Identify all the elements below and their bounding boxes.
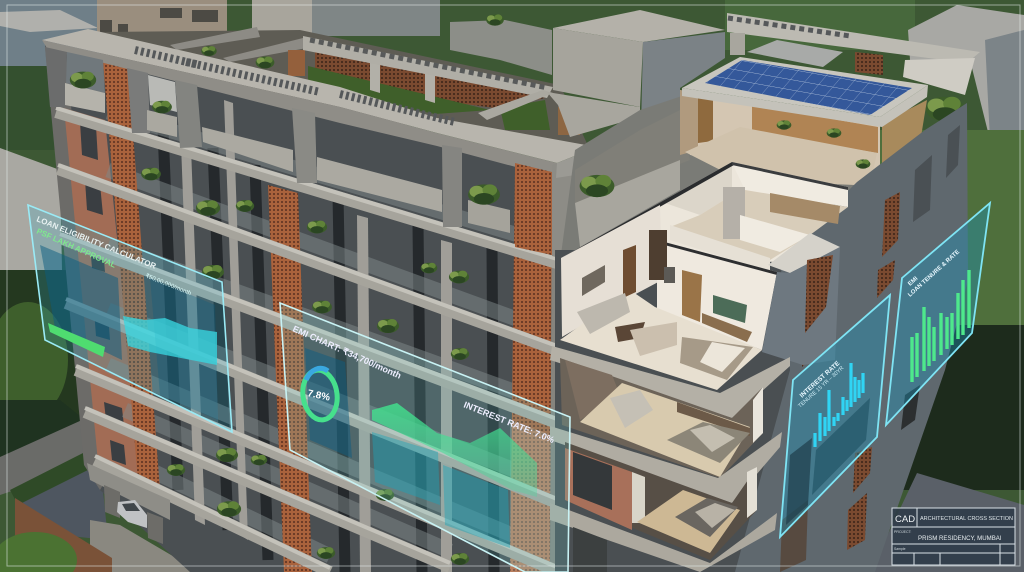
panel heading: LOAN ELIGIBILITY CALCULATOR <box>35 215 158 271</box>
balcony planters <box>141 168 469 565</box>
central concrete core <box>553 10 725 173</box>
green action bar <box>48 323 105 357</box>
project label: PROJECT: <box>894 530 912 534</box>
panel title: INTEREST RATE <box>799 360 842 399</box>
roof deck and lounge <box>200 87 292 132</box>
interest rate label: INTEREST RATE: 7.0% <box>462 400 556 445</box>
panel value: ₹50,00,000/month <box>144 272 192 297</box>
dark window glazing <box>163 130 494 572</box>
tower behind roof <box>252 0 552 75</box>
hologram panel: EMI chart <box>280 303 570 572</box>
slab <box>550 503 777 572</box>
slab <box>550 346 790 418</box>
bars <box>815 363 863 447</box>
right tower face <box>735 103 968 572</box>
lower bedroom level <box>565 442 757 560</box>
top floor plan rooms <box>561 162 848 272</box>
kitchen and bedroom level <box>560 358 763 478</box>
CAD label: CAD <box>895 514 915 525</box>
roof terrace: back beams and pergola <box>100 27 640 185</box>
area chart <box>123 316 217 365</box>
area chart <box>372 403 537 497</box>
icon: parked car <box>117 500 147 528</box>
bars <box>912 270 969 382</box>
floor slabs <box>56 108 557 572</box>
CAD title block <box>892 508 1015 565</box>
row labels: Sample <box>894 547 906 551</box>
panel title: EMI <box>907 276 920 287</box>
data tiles <box>786 438 812 525</box>
panel: cutaway apartments <box>550 162 848 572</box>
pool <box>240 113 512 190</box>
living room <box>560 205 777 390</box>
balcony railings <box>108 112 555 556</box>
project name: PRISM RESIDENCY, MUMBAI <box>918 535 1002 542</box>
ground floor columns <box>104 485 163 544</box>
hologram panel: cyan bar chart <box>780 295 890 537</box>
donut gauge <box>300 368 340 422</box>
left bay windows <box>80 122 126 465</box>
back parapet and solar-side pergola <box>727 13 980 95</box>
drawing title: ARCHITECTURAL CROSS SECTION <box>920 516 1013 522</box>
columns and brick screens <box>103 62 575 572</box>
concrete backing behind cutaway <box>555 90 880 572</box>
gauge value: 7.8% <box>306 388 331 404</box>
concrete pier <box>762 233 840 365</box>
panel subheading: PSF LAKH APPROVAL <box>35 227 117 270</box>
panel subtitle: LOAN TENURE & RATE <box>907 249 961 298</box>
facade base <box>45 45 566 572</box>
chart title: EMI CHART: ₹34,700/month <box>291 324 403 381</box>
slab <box>550 426 782 503</box>
lowest window <box>573 527 607 572</box>
roof beams and piers <box>42 29 597 262</box>
penthouse with solar canopy <box>575 57 964 247</box>
hologram panel: green bar chart <box>886 203 990 425</box>
panel subtitle: TENURE 15 YR – 30YR <box>797 365 845 409</box>
hologram panel: loan eligibility calculator <box>28 205 232 432</box>
